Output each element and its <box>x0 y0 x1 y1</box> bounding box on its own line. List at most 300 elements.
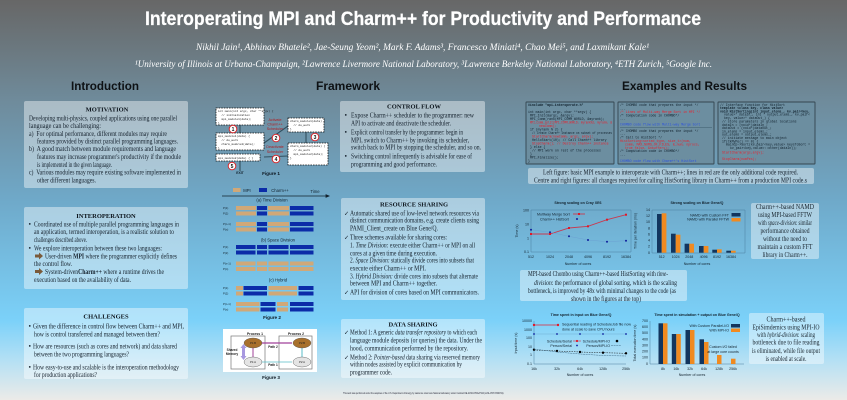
bar chart: strong scaling on Blue Gene/Q: 2 <box>648 244 650 248</box>
code panel: left: MPI_Comm_split(MPI_COMM_WORLD, myrank%2, myrank, & <box>530 120 612 124</box>
interoperation text: the control flow. <box>34 260 72 268</box>
code box: charm module 2: // do_work <box>290 148 310 152</box>
callout: NAMD: without the need to <box>763 234 807 243</box>
code panel: centre: ... <box>620 152 626 156</box>
code panel: right <box>718 102 815 164</box>
line chart: time spent in input: Person/Serial <box>550 344 572 348</box>
panel: data sharing <box>341 319 485 378</box>
code panel: left: if (myrank % 2) { <box>530 128 563 132</box>
interoperation text: challenges described above. <box>34 236 87 244</box>
chart: space division: P(1) <box>223 245 228 249</box>
interoperation text: Coordinated use of multiple parallel programming languages in <box>34 220 179 228</box>
code panel: centre: /* CHOMBO code that prepares the input */ <box>620 129 699 133</box>
line chart: time spent in input: 64k <box>577 367 583 371</box>
node labels: P1:A <box>250 360 256 364</box>
code panel: right: value>* dataIn_, int * output_elems_, kv_pair< <box>724 112 810 116</box>
line chart: strong scaling on Cray XE6: Number of cores <box>565 262 591 266</box>
motivation text: other different languages. <box>37 176 96 184</box>
code panel: right: key, value>* dataOut_) { <box>724 116 770 120</box>
code panel: left: } else { <box>530 145 545 149</box>
challenges text <box>28 322 184 379</box>
data sharing text: ✓ <box>344 330 349 336</box>
step numbers: 1 <box>232 127 235 133</box>
process labels: Process 1 <box>247 332 263 336</box>
line chart: strong scaling on Cray XE6: 100 <box>523 208 529 212</box>
figure 2: processor allocation <box>222 188 329 312</box>
line chart: strong scaling on Cray XE6: Charm++ HistSort <box>540 218 569 222</box>
callout: NAMD: Charm++-based NAMD <box>756 202 815 211</box>
footer note: This work was performed under the auspices of the U.S. Department of Energy by Lawrence Livermore National Laboratory under Contract DE-AC52-07NA27344 (LLNL-POST-669741). <box>343 391 504 395</box>
line chart: strong scaling on Cray XE6: Strong scaling on Cray XE6 <box>554 201 602 205</box>
bar chart: time spent in simulation and output: 8k <box>661 367 665 371</box>
callout: NAMD: using MPI-based FFTW <box>758 210 812 219</box>
code panel: left <box>526 102 614 164</box>
code panel: left: StartCharm(newComm, argc, argv); <box>532 134 593 138</box>
code box: charm module 2: charm_module2(data) { <box>290 144 326 148</box>
label: activate scheduler: Charm++ <box>267 122 283 126</box>
callout: EpiSimdemics: with hybrid-division: scaling <box>757 330 815 339</box>
code panel: centre: /* Lines of Multi-way Merge Sort in MPI */ <box>620 110 700 114</box>
resource sharing text: execute either Charm++ or MPI. <box>350 264 426 272</box>
bar chart: strong scaling on Blue Gene/Q: 16384 <box>726 255 736 259</box>
callout: Chombo: bottleneck, is improved by 48x with minimal changes to the code (as <box>528 286 676 295</box>
motivation text <box>29 114 181 184</box>
bar chart: strong scaling on Blue Gene/Q: 14 <box>646 208 650 212</box>
data sharing text: Method 1: A generic data transfer repository to which each <box>350 328 477 336</box>
line chart: time spent in input: Schedule/MPI-IO <box>583 340 610 344</box>
bar chart: strong scaling on Blue Gene/Q: NAMD with Parallel FFTW <box>687 218 730 222</box>
motivation text: is implemented in the given language. <box>37 161 112 169</box>
bar chart: strong scaling on Blue Gene/Q: Strong scaling on Blue Gene/Q <box>671 201 724 205</box>
data sharing text <box>344 328 482 376</box>
interoperation text: System-drivenCharm++ where a runtime drives the <box>45 268 164 276</box>
code panel: centre: /* Computation code in CHOMBO*/ <box>620 149 679 153</box>
code panel: right: in_elems = input_elems_; <box>722 130 768 134</box>
code panel: left: MPI_Comm_rank(MPI_COMM_WORLD, &myrank); <box>530 117 605 121</box>
challenges text: • <box>28 322 32 330</box>
callout: NAMD: performance obtained <box>760 226 810 235</box>
data sharing text: hood, communication performed by the repository. <box>350 344 468 352</box>
code panel: centre: comm, MAX_NUMS_OF_FILES, &_num, nprocs, <box>625 142 700 146</box>
bar chart: strong scaling on Blue Gene/Q: 12 <box>646 214 650 218</box>
text labels <box>226 345 278 367</box>
chart: space division: P(n-1) <box>223 262 231 266</box>
code box: charm module 2: } <box>290 156 292 160</box>
code panel: centre: /* CHOMBO code that prepares the input */ <box>620 103 699 107</box>
line chart: strong scaling on Cray XE6: 10 <box>525 222 529 226</box>
bar chart: time spent in simulation and output: 200 <box>642 350 648 354</box>
line chart: time spent in input: Number of cores <box>567 373 593 377</box>
panel: motivation <box>24 101 188 188</box>
text labels: Memory <box>226 352 238 356</box>
bar chart: time spent in simulation and output: at large core counts <box>707 350 739 354</box>
data sharing heading: DATA SHARING <box>388 322 438 328</box>
control flow heading: CONTROL FLOW <box>387 104 441 110</box>
caption: code figures <box>528 168 814 184</box>
callout: EpiSimdemics: is enabled at scale. <box>766 354 807 363</box>
control flow text: • <box>344 112 348 120</box>
code panel: right: // Interface function for HistSort <box>720 103 785 107</box>
line chart: strong scaling on Cray XE6: 4096 <box>584 255 592 259</box>
white background <box>223 329 317 372</box>
code panel: left: #include "mpi-interoperate.h" <box>528 103 584 107</box>
bar chart: strong scaling on Blue Gene/Q: 8192 <box>713 255 721 259</box>
bar chart: time spent in simulation and output: 500 <box>642 331 648 335</box>
motivation text: language can be challenging: <box>29 122 101 130</box>
chart: space division: P(n) <box>223 267 228 271</box>
challenges text: • <box>28 364 32 372</box>
step numbers: 5 <box>231 164 234 170</box>
chart: time division: P(2) <box>223 212 228 216</box>
heading: Introduction: Introduction <box>71 79 139 93</box>
figure 1: control flow diagram <box>216 108 328 175</box>
motivation text: features may increase programmer's productivity if the module <box>37 153 181 161</box>
resource sharing text: Three schemes available for sharing cores: <box>350 234 447 242</box>
label: activate scheduler: Activate <box>268 118 282 122</box>
bar chart: time spent in simulation and output: With MPI-IO <box>709 328 729 332</box>
code panel: right: // store parameters in global locations <box>722 120 797 124</box>
resource sharing text: PAMI_Client_create on Blue Gene/Q. <box>350 224 438 232</box>
resource sharing text: ✓ <box>344 236 349 242</box>
motivation box <box>24 101 188 188</box>
code panel: left: int main(int argc, char **argv) { <box>528 110 591 114</box>
line chart: strong scaling on Cray XE6: 512 <box>528 255 534 259</box>
line chart: time spent in input: Time spent in input on Blue Gene/Q <box>551 313 612 317</box>
line chart: time spent in input: Person/MPI-IO <box>586 344 610 348</box>
motivation text: b) A good match between module requirements and language <box>29 145 176 153</box>
resource sharing text: 1. Time Division: execute either Charm++ or MPI on all <box>350 242 475 250</box>
interoperation heading: INTEROPERATION <box>76 213 136 220</box>
callout: NAMD: maintain a custom FFT <box>758 242 813 251</box>
exit label: EXIT <box>236 171 245 175</box>
code box: charm module 2: mpi_module2(data); <box>290 152 324 156</box>
panel: interoperation <box>24 207 188 289</box>
bar chart: time spent in simulation and output <box>633 313 744 377</box>
line chart: time spent in input: 128k <box>599 367 607 371</box>
line chart: time spent in input: 16k <box>531 367 537 371</box>
code panel: left: MPI_Init(&argc, &argv); <box>530 113 574 117</box>
code box: mpi module: mpi_module1(data) { <box>218 134 250 138</box>
bar chart: time spent in simulation and output: Total execution time (s) <box>633 325 637 361</box>
interoperation text: execution based on the availability of data. <box>34 276 131 284</box>
step numbers: 4 <box>275 157 278 163</box>
callout: EpiSimdemics: bottleneck due to file reading <box>752 338 820 346</box>
node labels: P1:B <box>250 341 256 345</box>
line chart: time spent in input: 1 <box>530 353 532 357</box>
path arrows <box>253 343 302 362</box>
motivation text: Developing multi-physics, coupled applications using one parallel <box>29 114 177 122</box>
code box: mpi module: } <box>218 146 220 150</box>
code panel: right: StartCharm(argc,argv); <box>722 150 764 154</box>
legend <box>233 188 320 194</box>
challenges text: for production applications? <box>34 371 97 379</box>
bar chart: time spent in simulation and output: With Custom Parallel-I/O <box>689 324 729 328</box>
interoperation box <box>24 207 188 289</box>
caption: figure 2: Figure 2 <box>263 315 281 320</box>
line chart: time spent in input: 1000 <box>524 328 532 332</box>
bar chart: time spent in simulation and output: 600 <box>642 325 648 329</box>
code panel: left: HelloStart(10); // Call Charm++ library <box>532 138 607 142</box>
code panel: centre: HistSorting<sorted_type, size_t>(num, <box>620 139 691 143</box>
code panel: left: StopCharm(); // Destroy Charm++ instance <box>532 142 609 146</box>
bar chart: strong scaling on Blue Gene/Q: 512 <box>659 255 665 259</box>
bar chart: strong scaling on Blue Gene/Q: 6 <box>648 232 650 236</box>
data sharing text: Method 2: Pointer-based data sharing via reserved memory <box>350 354 480 362</box>
bar chart: time spent in simulation and output: 128k <box>715 367 723 371</box>
code panel: centre <box>618 102 714 164</box>
code box: main <box>216 108 274 125</box>
chart: space division: P(2) <box>223 251 228 255</box>
panel: challenges <box>24 308 188 379</box>
bar chart: time spent in simulation and output: Number of cores <box>679 373 705 377</box>
code panel: right: mainCp->Sort(kv_pair<key,value> keysToSort = <box>726 142 810 146</box>
icon: arrow system-driven <box>35 268 43 275</box>
figure 3: data sharing diagram <box>223 329 317 372</box>
line chart: strong scaling on Cray XE6: 0.1 <box>524 250 529 254</box>
step numbers: 3 <box>314 135 317 141</box>
node labels: P2:B <box>299 341 305 345</box>
panel: control flow <box>340 101 485 172</box>
callout: Chombo: shown in the figures at the top) <box>571 294 641 303</box>
control flow text <box>344 112 481 168</box>
chart: hybrid: P(1) <box>223 286 228 290</box>
control flow box <box>340 101 485 172</box>
code panel: left: // Create Charm++ instance on subset of processes <box>532 131 612 135</box>
chart: space division <box>223 238 314 271</box>
line chart: time spent in input: Sequential reading of ScheduleJob file now <box>562 322 631 326</box>
caption: figure 3: Figure 3 <box>262 375 280 380</box>
code panel: right: StopCharm(numPes); <box>722 157 757 161</box>
step markers <box>228 125 319 170</box>
bar chart: time spent in simulation and output: Time spent in simulation + output on Blue Gene/Q <box>654 313 740 317</box>
challenges text: How easy-to-use and scalable is the interoperation methodology <box>33 364 179 372</box>
code panel: left: MPI_Finalize(); <box>530 156 559 160</box>
bar chart: time spent in simulation and output: 700 <box>642 319 648 323</box>
line chart: time spent in input: 10 <box>528 345 532 349</box>
resource sharing text <box>344 210 480 296</box>
code panel: right: dataIn = (void*)dataIn_; <box>722 123 768 127</box>
bar chart: time spent in simulation and output: 16k <box>673 367 679 371</box>
code panel: left: } <box>530 152 532 156</box>
challenges text: • <box>28 342 32 350</box>
line chart: strong scaling on Cray XE6: 1024 <box>546 255 554 259</box>
control flow text: API to activate and deactivate the scheduler. <box>351 120 451 128</box>
line chart: time spent in input: 0.1 <box>527 362 532 366</box>
legend: Charm++ <box>271 188 289 193</box>
caption: figure 1: Figure 1 <box>262 171 280 176</box>
label: deactivate scheduler <box>266 145 284 154</box>
bar chart: strong scaling on Blue Gene/Q: 1024 <box>672 255 680 259</box>
data sharing text: programmer code. <box>350 368 392 376</box>
callout: Chombo <box>520 269 687 303</box>
chart: hybrid: P(n-1) <box>223 302 231 306</box>
heading: Examples and Results: Examples and Results <box>622 79 747 93</box>
bar chart: strong scaling on Blue Gene/Q: Number of cores <box>684 262 710 266</box>
label: deactivate scheduler: Deactivate <box>266 145 284 149</box>
interoperation text: an application, termed interoperation, is a realistic solution to <box>34 228 174 236</box>
bar chart: strong scaling on Blue Gene/Q: 10 <box>646 220 650 224</box>
heading: Framework: Framework <box>316 79 380 93</box>
control flow text: Explicit control transfer by the programmer: begin in <box>351 128 463 136</box>
chart: hybrid: P(n) <box>223 308 228 312</box>
line chart: time spent in input: 100 <box>526 336 532 340</box>
code box: mpi module: // do_work <box>218 138 238 142</box>
code box: main: } <box>218 121 220 125</box>
line chart: time spent in input: Input time (s) <box>514 333 518 353</box>
code panel: left: } <box>528 159 530 163</box>
code panel: right: template <class key, class value> <box>720 106 783 110</box>
process nodes <box>244 338 311 367</box>
code panel: left: newComm); <box>539 124 556 128</box>
resource sharing heading: RESOURCE SHARING <box>380 202 448 208</box>
code box: charm module 1 <box>288 118 326 132</box>
resource sharing text: 3. Hybrid Division: divide cores into subsets that alternate <box>350 272 478 280</box>
control flow text: • <box>344 128 348 136</box>
line chart: strong scaling on Cray XE6: Multiway Merge Sort <box>537 212 570 216</box>
node labels: P2:A <box>299 360 305 364</box>
code box: mpi module <box>216 133 264 150</box>
bar chart: strong scaling on Blue Gene/Q: 4 <box>648 238 650 242</box>
resource sharing box <box>341 198 485 300</box>
callout: EpiSimdemics: Charm++-based <box>766 314 806 324</box>
line chart: strong scaling on Cray XE6: 1 <box>527 236 529 240</box>
title: Interoperating MPI and Charm++ for Productivity and Performance <box>145 9 701 30</box>
code panel: right: void HistSorting(int input_elems_, kv_pair<key, <box>720 110 810 114</box>
data sharing text: within nodes assisted by explicit communication by <box>350 360 462 368</box>
resource sharing text: API for division of cores based on MPI communicators. <box>350 288 479 296</box>
line chart: time spent in input: done at scale to save CPU hours <box>562 328 615 332</box>
control flow text: switch back to MPI by stopping the scheduler, and so on. <box>351 144 481 152</box>
resource sharing text: ✓ <box>344 290 349 296</box>
interoperation text: We explore interoperation between these two languages: <box>34 244 162 252</box>
chart: time division: P(1) <box>223 206 228 210</box>
code panel: centre: ... <box>620 106 626 110</box>
callout: Chombo: MPI-based Chombo using Charm++-based HistSorting with time- <box>528 269 668 278</box>
label: activate scheduler <box>267 118 284 131</box>
data sharing box <box>341 319 485 378</box>
challenges box <box>24 308 188 379</box>
resource sharing text: Automatic shared use of low-level network resources via <box>350 210 480 218</box>
code panel: centre: /* Call to HistSort */ <box>620 136 662 140</box>
control flow text: Switching control infrequently is advisable for ease of <box>351 152 472 160</box>
motivation heading: MOTIVATION <box>86 106 129 114</box>
line chart: strong scaling on Cray XE6 <box>515 201 631 266</box>
control flow text: Expose Charm++ scheduler to the programmer: new <box>351 112 475 120</box>
code box: charm module 2 <box>288 143 328 165</box>
line chart: strong scaling on Cray XE6: 16384 <box>621 255 631 259</box>
motivation text: features provided by distinct parallel programming languages. <box>37 138 178 146</box>
connectors <box>240 125 306 171</box>
legend: MPI <box>243 188 251 193</box>
process labels: Process 2 <box>288 332 304 336</box>
bar chart: strong scaling on Blue Gene/Q: 4096 <box>700 255 708 259</box>
bar chart: strong scaling on Blue Gene/Q: NAMD with Custom FFT <box>690 214 730 218</box>
resource sharing text: ✓ <box>344 212 349 218</box>
code box: main: // initialization <box>218 113 250 117</box>
motivation text: c) Various modules may require existing software implemented in <box>29 168 181 176</box>
control flow text: programming and good performance. <box>351 160 437 168</box>
line chart: strong scaling on Cray XE6: 8192 <box>603 255 611 259</box>
bar chart: time spent in simulation and output: 400 <box>642 338 648 342</box>
code panel: centre: /* Computation code in CHOMBO*/ <box>620 114 679 118</box>
challenges text: how is control transferred and managed between them? <box>34 330 160 338</box>
code box: main: int main(int argc, char **argv) { <box>218 109 274 113</box>
bar chart: time spent in simulation and output: 300 <box>642 344 648 348</box>
legend: Time <box>310 189 320 194</box>
text labels: Path 2 <box>268 345 278 349</box>
code panel: centre: CHOMBO code flow with Multi-way Merge Sort <box>620 122 700 126</box>
text labels: Path 1 <box>268 363 278 367</box>
line chart: strong scaling on Cray XE6: Time (s) <box>515 224 519 238</box>
shared memory arrow <box>240 344 246 360</box>
motivation text: a) For optimal performance, different modules may require <box>29 130 167 138</box>
bar chart: strong scaling on Blue Gene/Q <box>634 201 745 266</box>
line chart: time spent in input: 10000 <box>522 319 532 323</box>
code box: mpi module: charm_module1(data); <box>218 142 255 146</box>
code panel: centre: CHOMBO code flow with Charm++'s HistSort <box>620 159 697 163</box>
line chart: time spent in input: 32k <box>554 367 560 371</box>
chart: hybrid: (c) Hybrid <box>269 278 288 282</box>
chart: time division <box>223 198 314 232</box>
bar chart: time spent in simulation and output: 32k <box>687 367 693 371</box>
data sharing text: ✓ <box>344 356 349 362</box>
callout: Chombo: division: the performance of global sorting, which is the scaling <box>534 278 677 287</box>
bar chart: strong scaling on Blue Gene/Q: Time per iteration (ms) <box>634 213 638 249</box>
callout: NAMD <box>751 202 819 259</box>
step numbers: 2 <box>275 136 278 142</box>
bar chart: strong scaling on Blue Gene/Q: 8 <box>648 226 650 230</box>
callout: EpiSimdemics: is eliminated, while file output <box>752 346 821 355</box>
interoperation text: • <box>28 244 32 252</box>
chart: hybrid <box>223 278 314 312</box>
line chart: strong scaling on Cray XE6: 2048 <box>565 255 573 259</box>
code panel: centre: ... <box>620 132 626 136</box>
interoperation text: • <box>28 220 32 228</box>
code box: main: mpi_module1(data); <box>218 117 252 121</box>
code panel: right: out_elems = output_elems_; <box>722 132 772 136</box>
bar chart: strong scaling on Blue Gene/Q: 2048 <box>685 255 693 259</box>
code box: charm module 1: } <box>290 127 292 131</box>
challenges heading: CHALLENGES <box>83 314 129 320</box>
code box: exit: mpi_module2(data) { } <box>218 156 254 160</box>
bar chart: time spent in simulation and output: 0 <box>646 362 648 366</box>
code panel: centre: true_false, &nbuffers); <box>625 146 669 150</box>
line chart: time spent in input: Schedule/Serial <box>547 340 572 344</box>
interoperation text: User-driven MPI where the programmer explicitly defines <box>45 252 177 260</box>
step numbers <box>231 127 317 170</box>
callout: EpiSimdemics <box>749 313 824 364</box>
challenges text: How are resources (such as cores and network) and data shared <box>33 342 177 350</box>
process boxes <box>231 336 312 369</box>
panel: resource sharing <box>341 198 485 300</box>
line chart: time spent in input <box>514 313 631 377</box>
code box: charm module 1: // do_work <box>290 123 310 127</box>
label: activate scheduler: Scheduler <box>267 127 284 131</box>
data sharing text: language module deposits (or queries) the data. Under the <box>350 336 482 344</box>
chart: time division: P(n-1) <box>223 222 231 226</box>
resource sharing text: between MPI and Charm++ together. <box>350 280 437 288</box>
callout: NAMD: library in Charm++. <box>762 250 808 259</box>
bar chart: time spent in simulation and output: Custom I/O failed <box>709 345 737 349</box>
code panel: left: // MPI work on rest of the processes <box>532 148 601 152</box>
line chart: time spent in input: 256k <box>622 367 630 371</box>
control flow text: MPI, switch to Charm++ by invoking its scheduler, <box>351 136 469 144</box>
bar chart: time spent in simulation and output: 100 <box>642 356 648 360</box>
resource sharing text: 2. Space Division: statically divide cores into subsets that <box>350 256 474 264</box>
code panel: right: dataOut = (void*)dataOut_; <box>722 126 772 130</box>
chart: hybrid: P(2) <box>223 292 228 296</box>
node labels <box>250 341 305 364</box>
